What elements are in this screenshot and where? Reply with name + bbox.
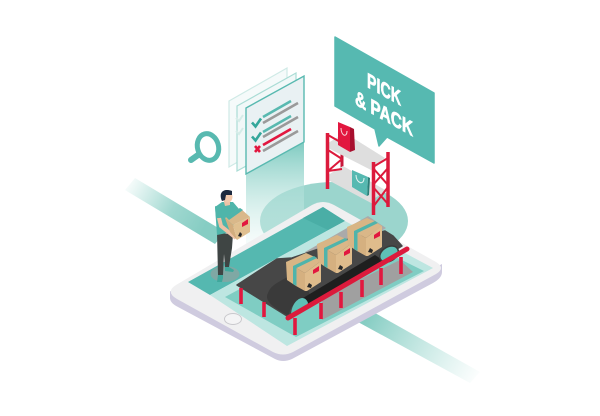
belt lower band [303, 255, 384, 305]
right face [305, 261, 321, 291]
heading: pick and pack: PICK [367, 68, 401, 111]
front legs [295, 257, 401, 335]
top shelf board [328, 133, 385, 171]
inner floor shade [225, 232, 424, 337]
speech bubble callout [335, 37, 434, 163]
cardboard box three [347, 218, 382, 256]
back legs [241, 288, 264, 317]
cross mark [255, 146, 260, 152]
tablet side edge [170, 264, 442, 361]
backdrop ellipse [260, 182, 408, 260]
tablet device [170, 202, 442, 361]
back sheet [229, 68, 287, 167]
cardboard box one [286, 253, 321, 291]
faded marks on middle sheet [236, 115, 243, 134]
legs [217, 233, 233, 275]
tablet top face [171, 202, 441, 354]
back section [286, 253, 317, 286]
belt curved fold [267, 270, 310, 315]
icon: home button [224, 314, 242, 324]
check mark one [252, 118, 261, 126]
heading: pick and pack [355, 62, 413, 141]
label [313, 266, 319, 274]
darker wall panel [303, 207, 345, 230]
stripe: left path [125, 178, 225, 244]
conveyor belt [237, 216, 413, 335]
front rail [288, 249, 407, 318]
back floor shadow [305, 216, 386, 265]
belt surface [237, 231, 402, 316]
list lines [263, 101, 298, 151]
back post [340, 150, 344, 171]
worker carrying box [210, 190, 250, 282]
belt roller, left [291, 298, 308, 316]
carried box [225, 208, 250, 240]
light beam under document [246, 142, 304, 246]
icon: magnifying glass [191, 131, 222, 163]
lower floor shadow [322, 260, 413, 320]
panel: checklist documents [229, 68, 304, 174]
front red posts and braces [328, 133, 388, 215]
top face [296, 258, 321, 273]
shelf with shopping bags [328, 122, 388, 215]
cardboard box two [317, 235, 352, 273]
shoes [217, 267, 234, 282]
heading: pick and pack: & PACK [355, 86, 413, 141]
check mark two [252, 132, 261, 140]
front sheet [246, 76, 304, 174]
stripe: right path [358, 313, 480, 383]
hair [221, 190, 232, 201]
torso [215, 202, 239, 235]
middle sheet [237, 73, 296, 171]
sleeve [218, 206, 219, 218]
belt roller, right [377, 243, 401, 265]
neck and face [223, 198, 230, 206]
left face [296, 268, 305, 291]
tape [293, 256, 317, 286]
screen floor, light teal [210, 221, 433, 346]
red shopping bag [338, 122, 355, 152]
teal shopping bag [352, 170, 370, 196]
icon on box [307, 283, 312, 288]
lower shelf board [328, 166, 387, 204]
arm [218, 214, 236, 238]
screen wall, dark teal [188, 207, 345, 295]
floor shadow [210, 266, 240, 282]
